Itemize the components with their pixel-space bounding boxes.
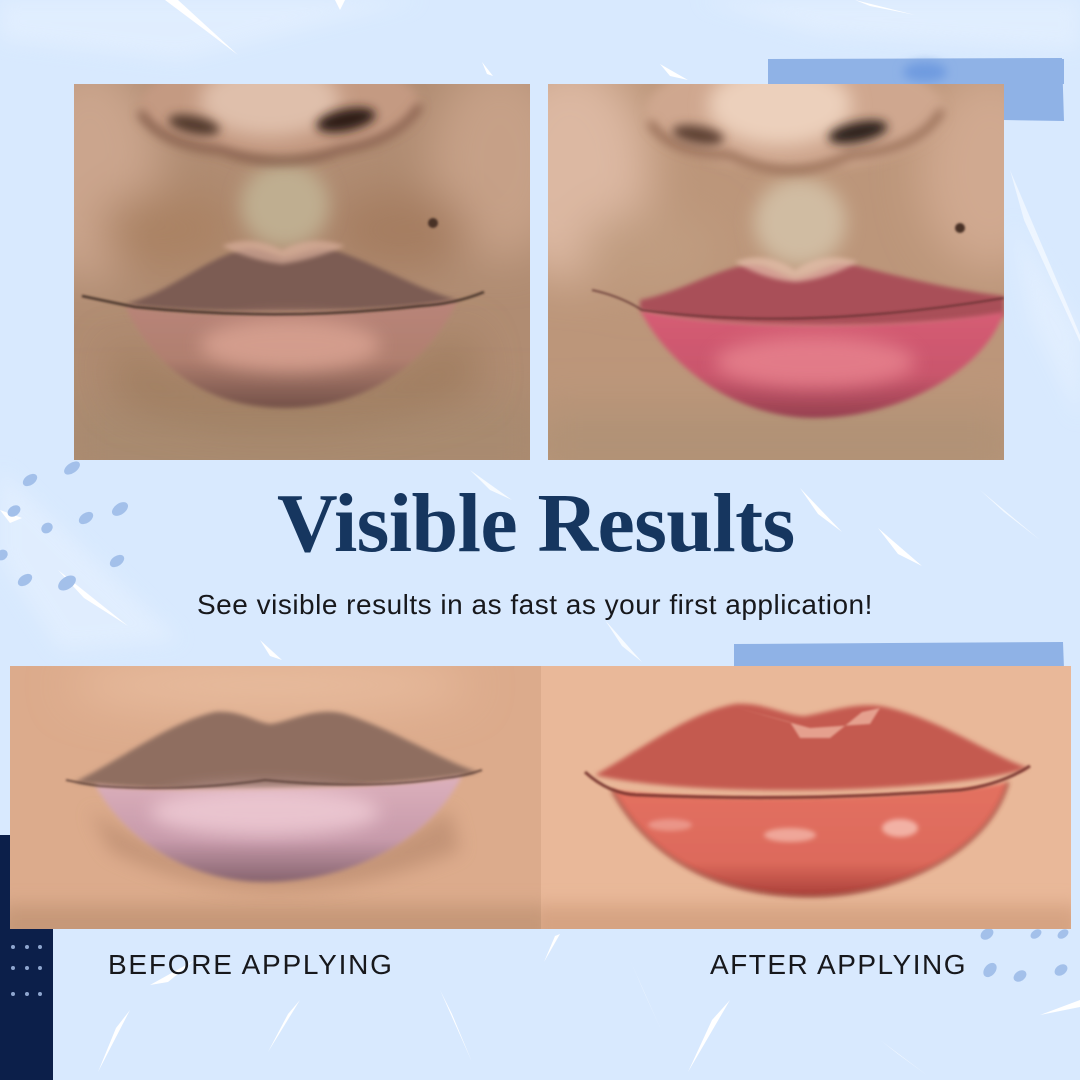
tape: middle right (734, 642, 1064, 669)
photo: before, face close-up (74, 84, 530, 460)
caption: before applying: BEFORE APPLYING (108, 949, 394, 980)
decorative dots: bottom right (978, 926, 1070, 984)
subtitle: See visible results in as fast as your first application! (197, 589, 873, 620)
photo: after, face close-up (548, 84, 1004, 460)
navy block with dot grid (0, 835, 53, 1080)
decorative dots: left (0, 459, 131, 594)
title: Visible Results (277, 477, 795, 570)
photo: after applying, lips (531, 666, 1080, 945)
photo: before applying, lips (10, 666, 541, 929)
caption: after applying: AFTER APPLYING (710, 949, 967, 980)
tape: top right (768, 58, 1064, 121)
